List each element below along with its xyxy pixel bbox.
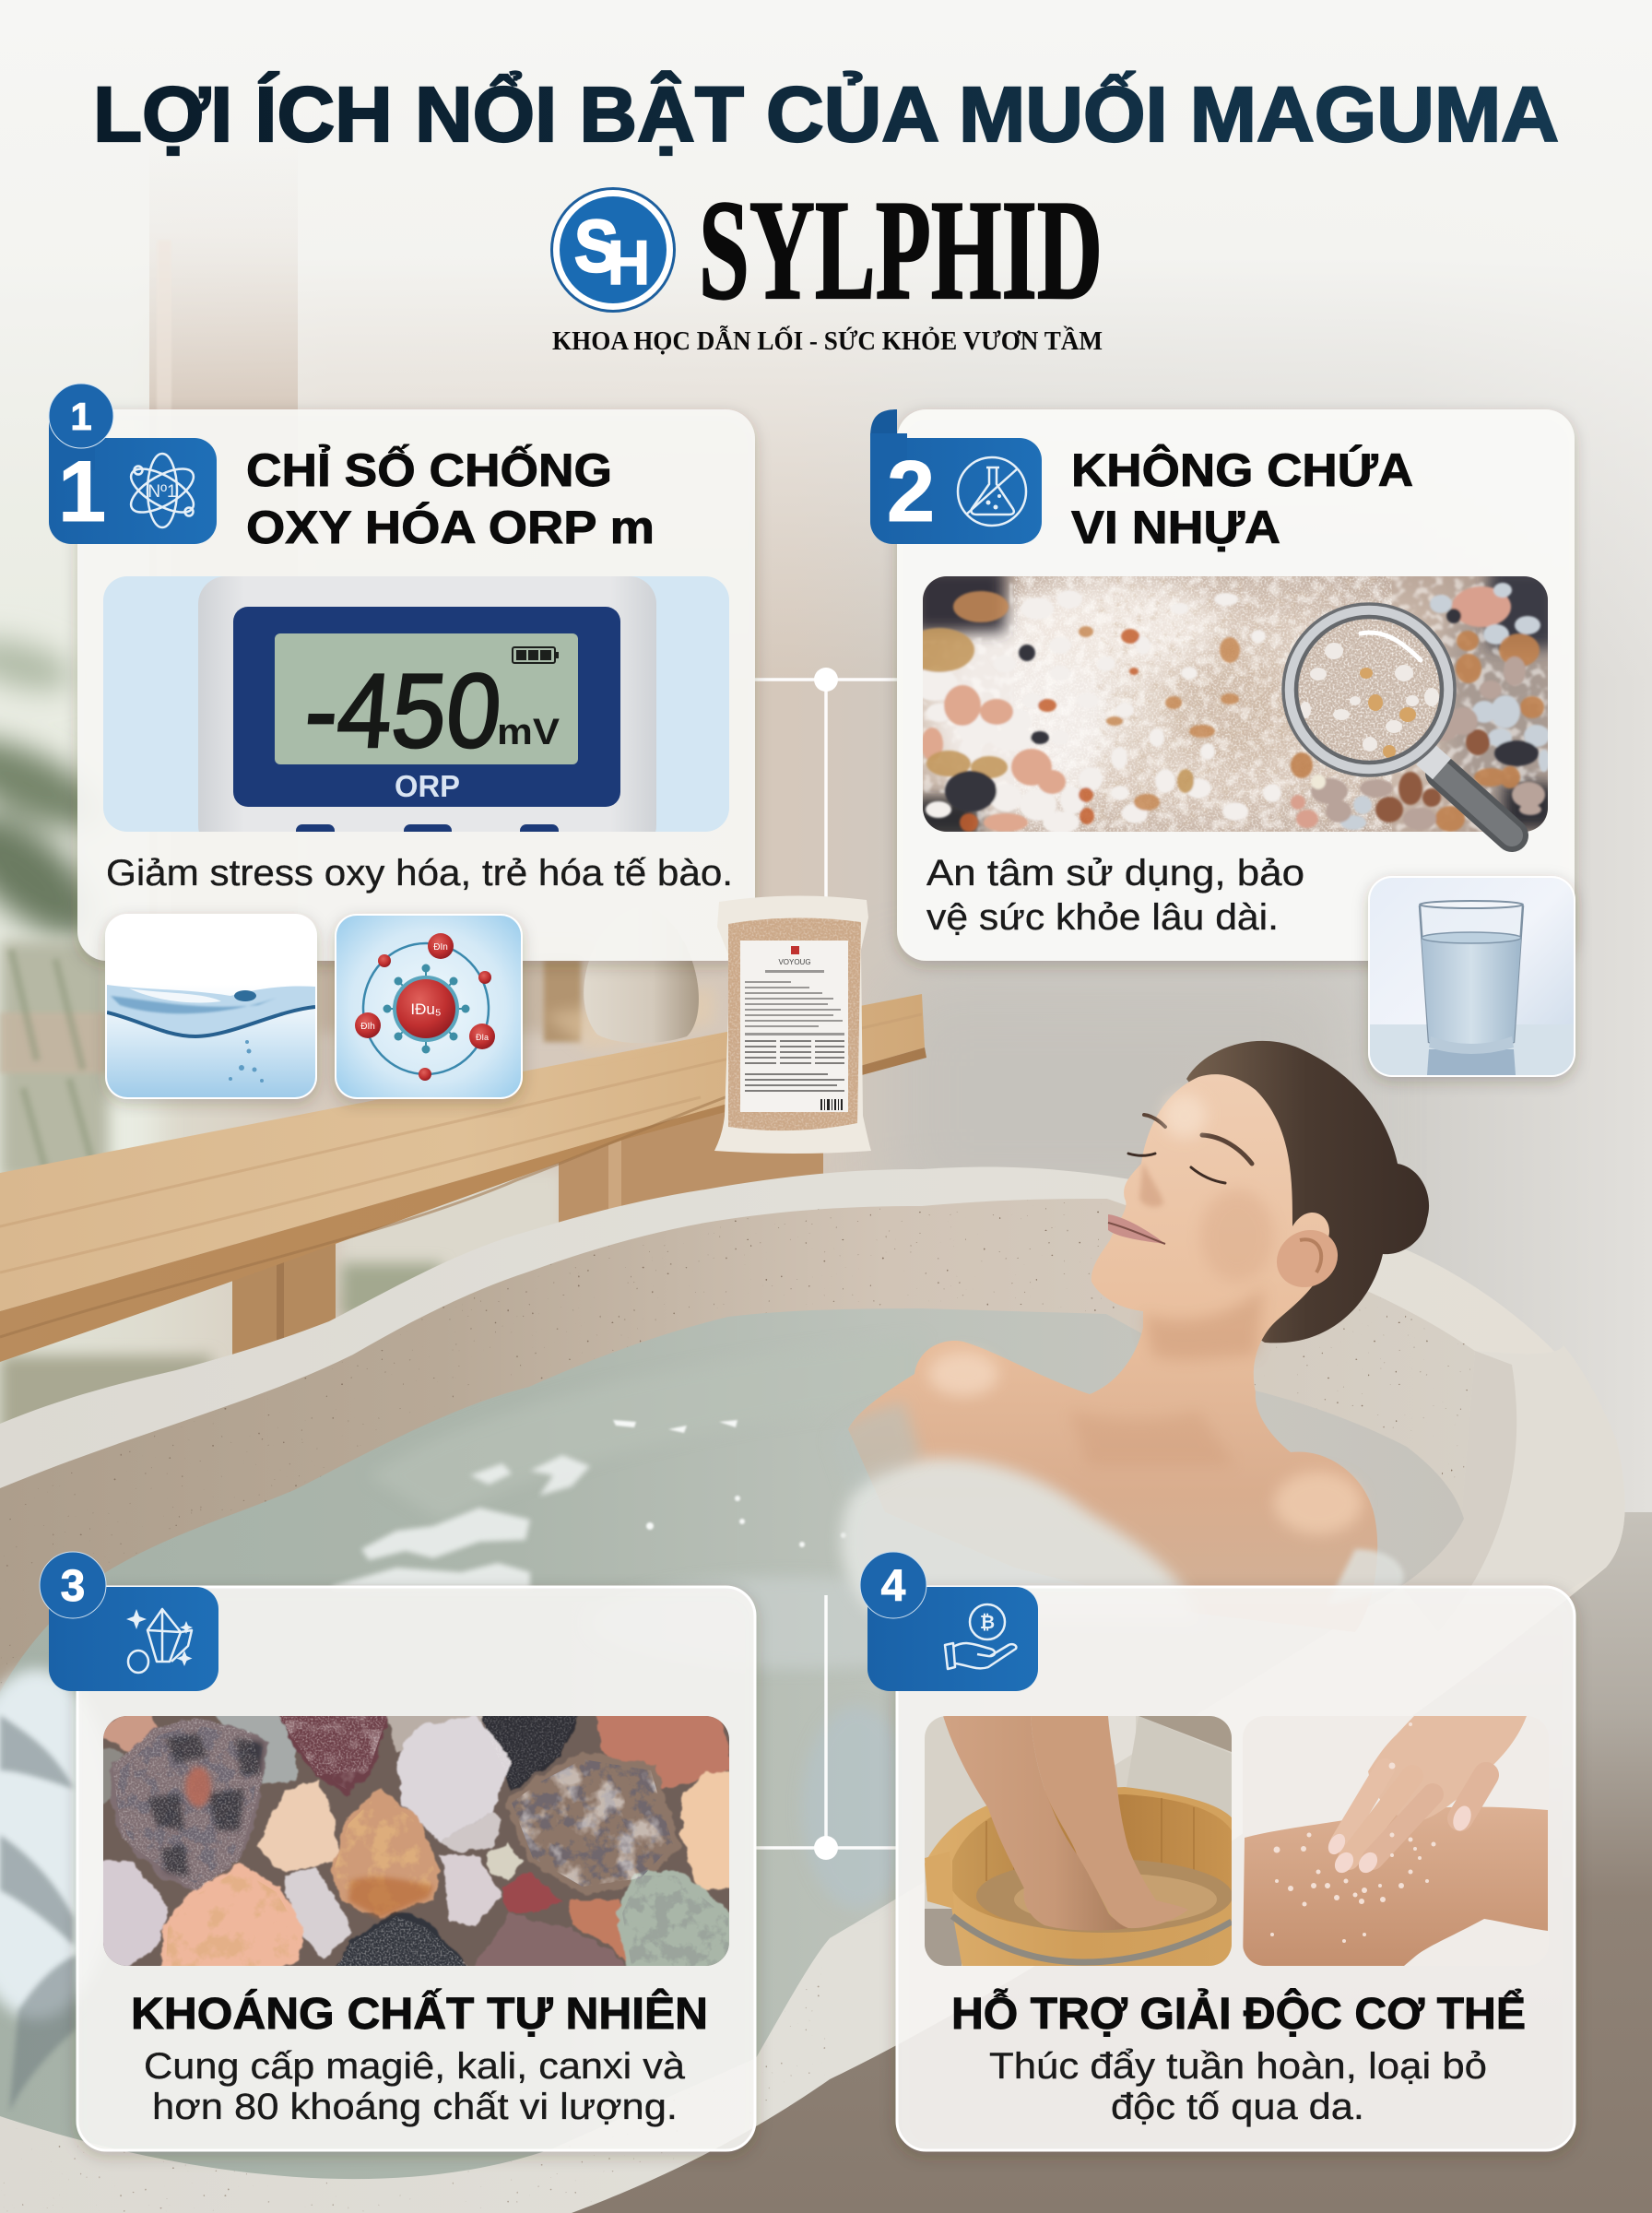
tab 3 with gem icon bbox=[40, 1552, 218, 1691]
facial details bbox=[928, 1094, 1363, 1534]
molecule tile: IĐu₅ bbox=[410, 1000, 442, 1018]
tab 1 with number and atom icon: Nº1 bbox=[148, 482, 177, 502]
panel 4 card bbox=[897, 1587, 1575, 2150]
panel 4 heading: HỖ TRỢ GIẢI ĐỘC CƠ THỂ bbox=[951, 1988, 1526, 2039]
wall behind the bench bbox=[317, 950, 1346, 1217]
soft haze at the top bbox=[0, 0, 1652, 610]
salt scrub photo bbox=[1243, 1716, 1549, 1966]
molecule tile: ĐIa bbox=[476, 1033, 489, 1042]
panel 1: ORP antioxidant bbox=[49, 384, 755, 1099]
minerals photo bbox=[97, 1710, 738, 1973]
ORP meter image: mV bbox=[497, 712, 560, 752]
logo badge: S bbox=[574, 205, 619, 287]
panel 2 description: vệ sức khỏe lâu dài. bbox=[926, 897, 1279, 938]
ORP meter image: -450 bbox=[301, 653, 506, 770]
water tile bbox=[105, 914, 317, 1099]
hair bbox=[1186, 1041, 1429, 1343]
woman relaxing in bath bbox=[830, 1041, 1429, 1632]
tab 1 with number and atom icon bbox=[49, 384, 217, 544]
title: LỢI ÍCH NỔI BẬT CỦA MUỐI MAGUMA bbox=[93, 71, 1559, 158]
floor bbox=[572, 1512, 1652, 2213]
panel 3 description: hơn 80 khoáng chất vi lượng. bbox=[152, 2087, 678, 2127]
tab 2 with number and flask icon bbox=[870, 409, 1042, 544]
glass of water tile bbox=[1368, 876, 1575, 1077]
molecule tile: ĐIh bbox=[360, 1022, 375, 1032]
panel 4 description: Thúc đẩy tuần hoàn, loại bỏ bbox=[989, 2046, 1487, 2087]
panel 4 description: độc tố qua da. bbox=[1111, 2087, 1364, 2127]
dark corners bbox=[913, 567, 1558, 839]
milky water over chest bbox=[841, 1458, 1198, 1623]
face, neck and shoulders bbox=[848, 1074, 1377, 1632]
panel 1 heading bbox=[246, 444, 655, 553]
product label: VOYOUG bbox=[778, 958, 811, 966]
tab 1 with number and atom icon: 1 bbox=[70, 395, 92, 438]
panel 3 description: Cung cấp magiê, kali, canxi và bbox=[144, 2046, 686, 2087]
front rim speckles bbox=[0, 1938, 830, 2213]
panel 1 card bbox=[77, 409, 755, 961]
bathtub inner wall with speckles bbox=[0, 1199, 1475, 1724]
logo: Sylphid bbox=[550, 171, 1103, 356]
panel 4 description bbox=[989, 2046, 1487, 2127]
water highlights bbox=[332, 1455, 590, 1588]
wooden bucket bbox=[925, 1787, 1232, 1973]
salt grains bbox=[904, 583, 1550, 834]
right rim block bbox=[1401, 1345, 1625, 1669]
salt photo with magnifier bbox=[904, 567, 1567, 839]
tab 4 with hand and coin icon: 4 bbox=[881, 1562, 906, 1611]
panel 4: body detox bbox=[860, 1552, 1575, 2150]
panel 2 description: An tâm sử dụng, bảo bbox=[926, 853, 1304, 893]
panel 2 heading: VI NHỰA bbox=[1071, 502, 1280, 553]
logo badge bbox=[550, 187, 676, 313]
under-bench background bbox=[0, 1171, 562, 1457]
panel 1 heading: OXY HÓA ORP m bbox=[246, 502, 655, 553]
panel 3 heading: KHOÁNG CHẤT TỰ NHIÊN bbox=[131, 1988, 708, 2039]
panel 2 description bbox=[926, 853, 1304, 938]
panel 2 card bbox=[897, 409, 1575, 961]
tab 2 with number and flask icon: 2 bbox=[887, 443, 935, 539]
logo badge: H bbox=[608, 228, 650, 298]
bath water bbox=[0, 1308, 1464, 2179]
product packet bbox=[714, 895, 871, 1154]
molecule tile bbox=[335, 914, 523, 1099]
molecule tile: ĐIn bbox=[433, 942, 448, 953]
panel 2: no microplastics bbox=[870, 409, 1575, 1077]
rock mottling bbox=[116, 1724, 263, 1883]
hand bbox=[1368, 1716, 1527, 1821]
panel 3 description bbox=[144, 2046, 686, 2127]
window and plants bbox=[0, 516, 160, 1173]
panel 1 description: Giảm stress oxy hóa, trẻ hóa tế bào. bbox=[106, 853, 733, 893]
ORP meter image: ORP bbox=[395, 769, 460, 803]
ORP meter image bbox=[103, 576, 729, 853]
foot soak photo bbox=[925, 1716, 1233, 1973]
product label bbox=[740, 941, 848, 1112]
brand name: SYLPHID bbox=[699, 171, 1103, 329]
tab 3 with gem icon: 3 bbox=[61, 1562, 85, 1611]
connector lines and dots bbox=[755, 668, 897, 1860]
panel 2 heading: KHÔNG CHỨA bbox=[1071, 444, 1413, 496]
soft grain texture bbox=[923, 576, 1548, 832]
panel 1 heading: CHỈ SỐ CHỐNG bbox=[246, 444, 612, 496]
bathtub outer stone bbox=[0, 1167, 1625, 2213]
panel 3: natural minerals bbox=[40, 1552, 755, 2150]
tab 4 with hand and coin icon: ₿ bbox=[980, 1613, 995, 1633]
wooden bench bbox=[0, 987, 926, 1362]
tab 1 with number and atom icon: 1 bbox=[58, 443, 106, 539]
tagline: KHOA HỌC DẪN LỐI - SỨC KHỎE VƯƠN TẦM bbox=[552, 326, 1103, 356]
legs bbox=[943, 1716, 1128, 1931]
panel 3 card bbox=[77, 1587, 755, 2150]
magnifying glass bbox=[1283, 604, 1512, 835]
tab 4 with hand and coin icon bbox=[860, 1552, 1038, 1691]
panel 2 heading bbox=[1071, 444, 1413, 553]
window frame bbox=[149, 238, 298, 409]
ceramic vase bbox=[584, 961, 699, 1043]
